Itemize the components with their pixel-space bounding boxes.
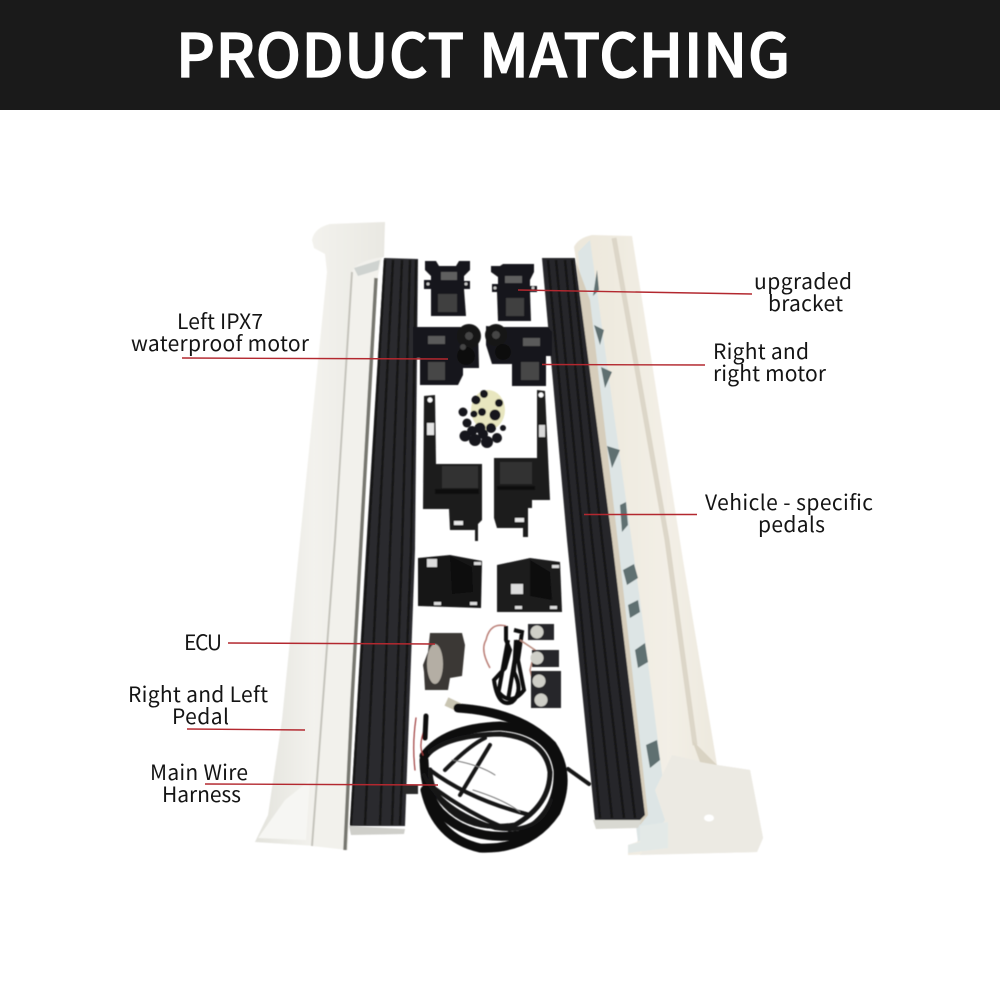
left motor	[413, 324, 481, 385]
label: left motor: Left IPX7	[177, 306, 263, 336]
upgraded bracket right	[491, 264, 537, 321]
label: upgraded bracket: bracket	[768, 288, 843, 318]
callout line: upgraded bracket	[518, 290, 752, 294]
label: main wire harness	[150, 757, 248, 809]
callout line: side pedal	[187, 729, 305, 730]
right pedal	[542, 258, 645, 829]
label: left motor	[131, 306, 310, 358]
callout line: ECU	[228, 643, 435, 644]
label: right motor: Right and	[713, 336, 809, 366]
label: right motor: right motor	[713, 358, 827, 388]
left side panel	[255, 222, 385, 850]
small switch harness and sensors	[484, 624, 561, 708]
right motor	[485, 324, 552, 386]
left pedal	[349, 258, 418, 835]
label: main wire harness: Harness	[162, 779, 241, 809]
right side panel	[574, 235, 763, 855]
label: upgraded bracket	[754, 266, 852, 318]
label: ECU: ECU	[184, 627, 222, 657]
callout line: pedals	[584, 514, 697, 516]
callout line: wire harness	[205, 784, 438, 785]
label: right and left pedal: Right and Left	[128, 679, 268, 709]
right mounting bracket	[494, 390, 550, 537]
right motor cover box	[497, 558, 562, 612]
callout line: left motor	[182, 358, 448, 359]
callout line: right motor	[542, 364, 705, 366]
title band	[0, 0, 1000, 110]
product photo kit	[255, 222, 763, 855]
title: PRODUCT MATCHING	[176, 8, 790, 95]
label: right motor	[713, 336, 827, 388]
label: vehicle pedals	[705, 487, 873, 539]
ECU	[423, 633, 465, 690]
label: upgraded bracket: upgraded	[754, 266, 852, 296]
main wire harness	[404, 697, 589, 848]
label: right and left pedal	[128, 679, 268, 731]
left motor cover box	[418, 555, 482, 608]
upgraded bracket left	[424, 261, 470, 316]
label: main wire harness: Main Wire	[150, 757, 248, 787]
fastener pile	[458, 390, 506, 448]
label: right and left pedal: Pedal	[172, 701, 229, 731]
left mounting bracket	[423, 395, 482, 541]
label: vehicle pedals: pedals	[758, 509, 825, 539]
label: vehicle pedals: Vehicle - specific	[705, 487, 873, 517]
label: left motor: waterproof motor	[131, 328, 310, 358]
